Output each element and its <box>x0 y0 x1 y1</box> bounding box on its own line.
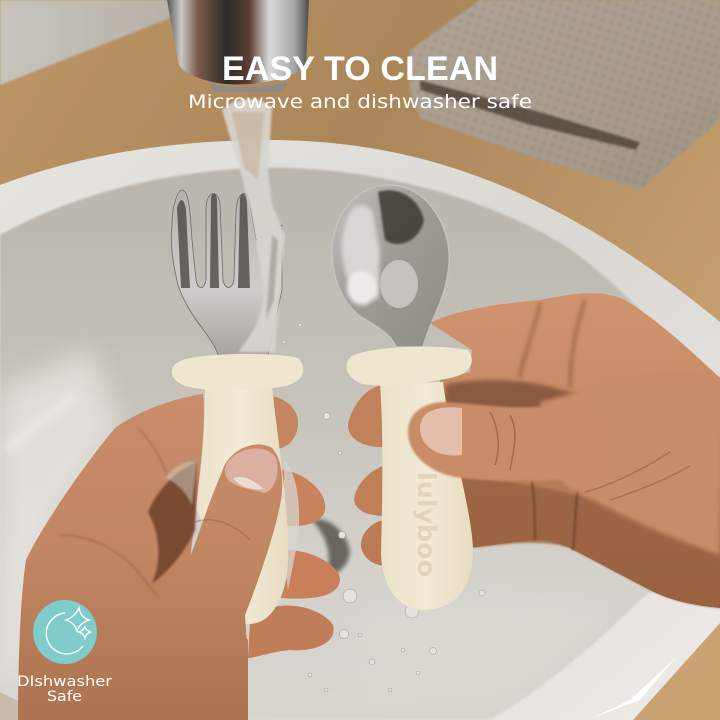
left thumb <box>120 444 282 720</box>
folded towel <box>410 0 720 190</box>
brand mark on handle: lulyboo <box>412 472 441 577</box>
knuckle creases <box>520 300 585 388</box>
title: EASY TO CLEAN <box>222 50 498 88</box>
icon caption: DIshwasher <box>17 674 112 690</box>
right hand body <box>430 293 720 608</box>
faucet <box>167 0 309 92</box>
drain <box>312 519 350 575</box>
dark lower fingers <box>450 478 720 608</box>
icon caption <box>17 674 112 705</box>
water stream <box>222 99 285 352</box>
dark cavity between fingers <box>148 462 197 584</box>
shadow gap between index finger and thumb <box>445 380 580 412</box>
right thumb <box>408 402 690 500</box>
suds around fork handle <box>165 462 197 505</box>
lit palm area <box>540 372 720 555</box>
icon caption: Safe <box>47 689 82 705</box>
right hand fingers behind handle <box>348 385 388 566</box>
spoon <box>332 185 449 347</box>
dishwasher safe icon <box>33 600 97 664</box>
water droplets <box>282 323 485 692</box>
fork <box>171 190 282 355</box>
palm creases <box>60 428 167 596</box>
left hand palm <box>18 394 248 720</box>
spoon handle with logo <box>347 347 473 610</box>
fork handle <box>172 354 303 624</box>
left hand fingers behind handle <box>248 396 340 658</box>
subtitle: Microwave and dishwasher safe <box>188 91 532 113</box>
